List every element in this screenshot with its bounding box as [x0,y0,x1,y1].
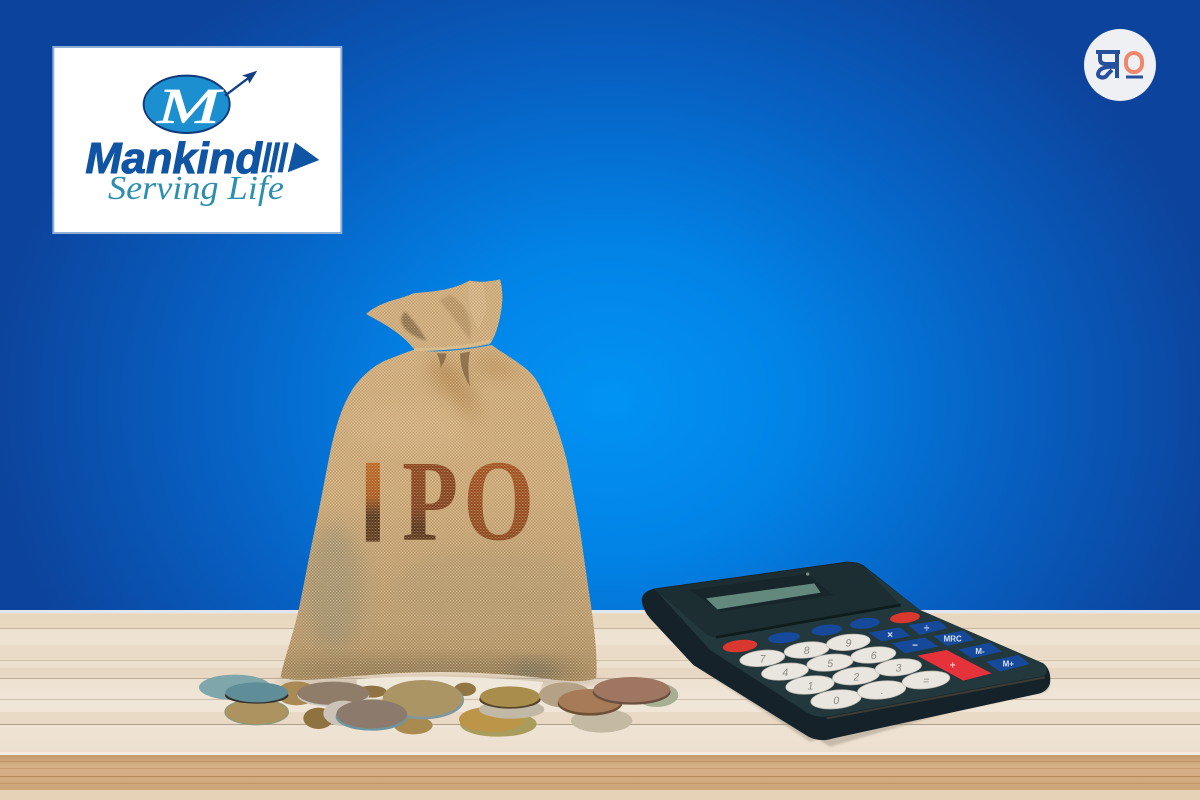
logo tagline: Serving Life [108,170,284,207]
coin [357,686,387,698]
calculator: + [950,661,956,672]
printed IPO lettering: P [402,437,458,565]
calculator: M- [975,647,985,656]
coin [459,707,524,732]
calculator key labels: 1 [807,680,814,692]
coin [297,682,369,705]
calculator white number keys [739,632,951,711]
calculator key labels: 3 [895,663,902,675]
coin [323,701,363,726]
coin [593,679,671,705]
calculator display housing [655,563,901,637]
coin [336,703,408,731]
calculator red plus key [917,650,992,681]
bag twine [414,341,491,349]
printed IPO lettering [366,462,530,542]
coin [460,711,537,737]
logo card: Mankind Serving Life [53,47,341,233]
calculator front edge [827,677,1045,718]
bag contact shadow [270,676,610,688]
coin [225,699,288,725]
coin [479,700,544,719]
calculator display bezel [690,574,833,612]
calculator: − [912,641,918,652]
coin [225,687,288,704]
printed IPO lettering: I [359,439,386,566]
calculator red keys [722,611,920,654]
logo speed stripes and triangle [261,142,319,172]
site badge icon [1084,29,1156,101]
coin [303,708,333,729]
coin [454,683,476,696]
bag top ruffle [366,279,502,350]
coin [297,684,369,707]
coin [480,686,540,707]
calculator top face [655,563,1047,717]
coin [277,681,317,705]
coin [571,709,632,733]
coin [383,681,464,719]
calculator key labels: 0 [833,695,840,707]
calculator: MRC [944,634,962,643]
coin pile [199,675,678,737]
calculator key labels: 7 [759,653,766,665]
calculator: × [887,630,893,641]
coin [383,680,463,717]
wooden table [0,610,1200,800]
calculator key labels: 8 [803,645,811,657]
calculator [642,562,1051,747]
bag body [280,345,597,682]
calculator: M+ [1003,660,1014,669]
calculator display screen [706,583,821,609]
coin [199,675,271,700]
logo wordmark: Mankind [85,135,264,183]
calculator key labels: = [922,675,930,687]
coin [336,700,407,728]
calculator: ÷ [924,623,930,634]
calculator key labels: 9 [845,637,852,649]
logo emblem: oval with M: M [156,78,223,133]
coin [394,716,433,734]
coin [479,690,541,709]
logo arrow [225,71,257,96]
blue gradient background [0,0,1200,612]
calculator key labels: 4 [782,667,789,679]
calculator shadow [693,665,1051,747]
coin [225,682,288,702]
coin [558,691,622,716]
calculator key labels [759,637,930,707]
coin [558,689,622,713]
money bag [270,279,610,690]
coin [593,677,670,702]
calculator key labels: 5 [827,658,834,670]
calculator body side [642,562,1050,740]
calculator key labels: 2 [853,671,860,683]
printed IPO lettering: O [463,438,534,565]
light table reflection under bag [357,677,543,697]
calculator key labels: . [880,685,885,697]
bag gathered folds [437,352,470,387]
coin [539,682,591,708]
calculator small blue keys [768,616,1030,672]
calculator key labels: 6 [870,650,878,662]
coin [635,683,678,707]
